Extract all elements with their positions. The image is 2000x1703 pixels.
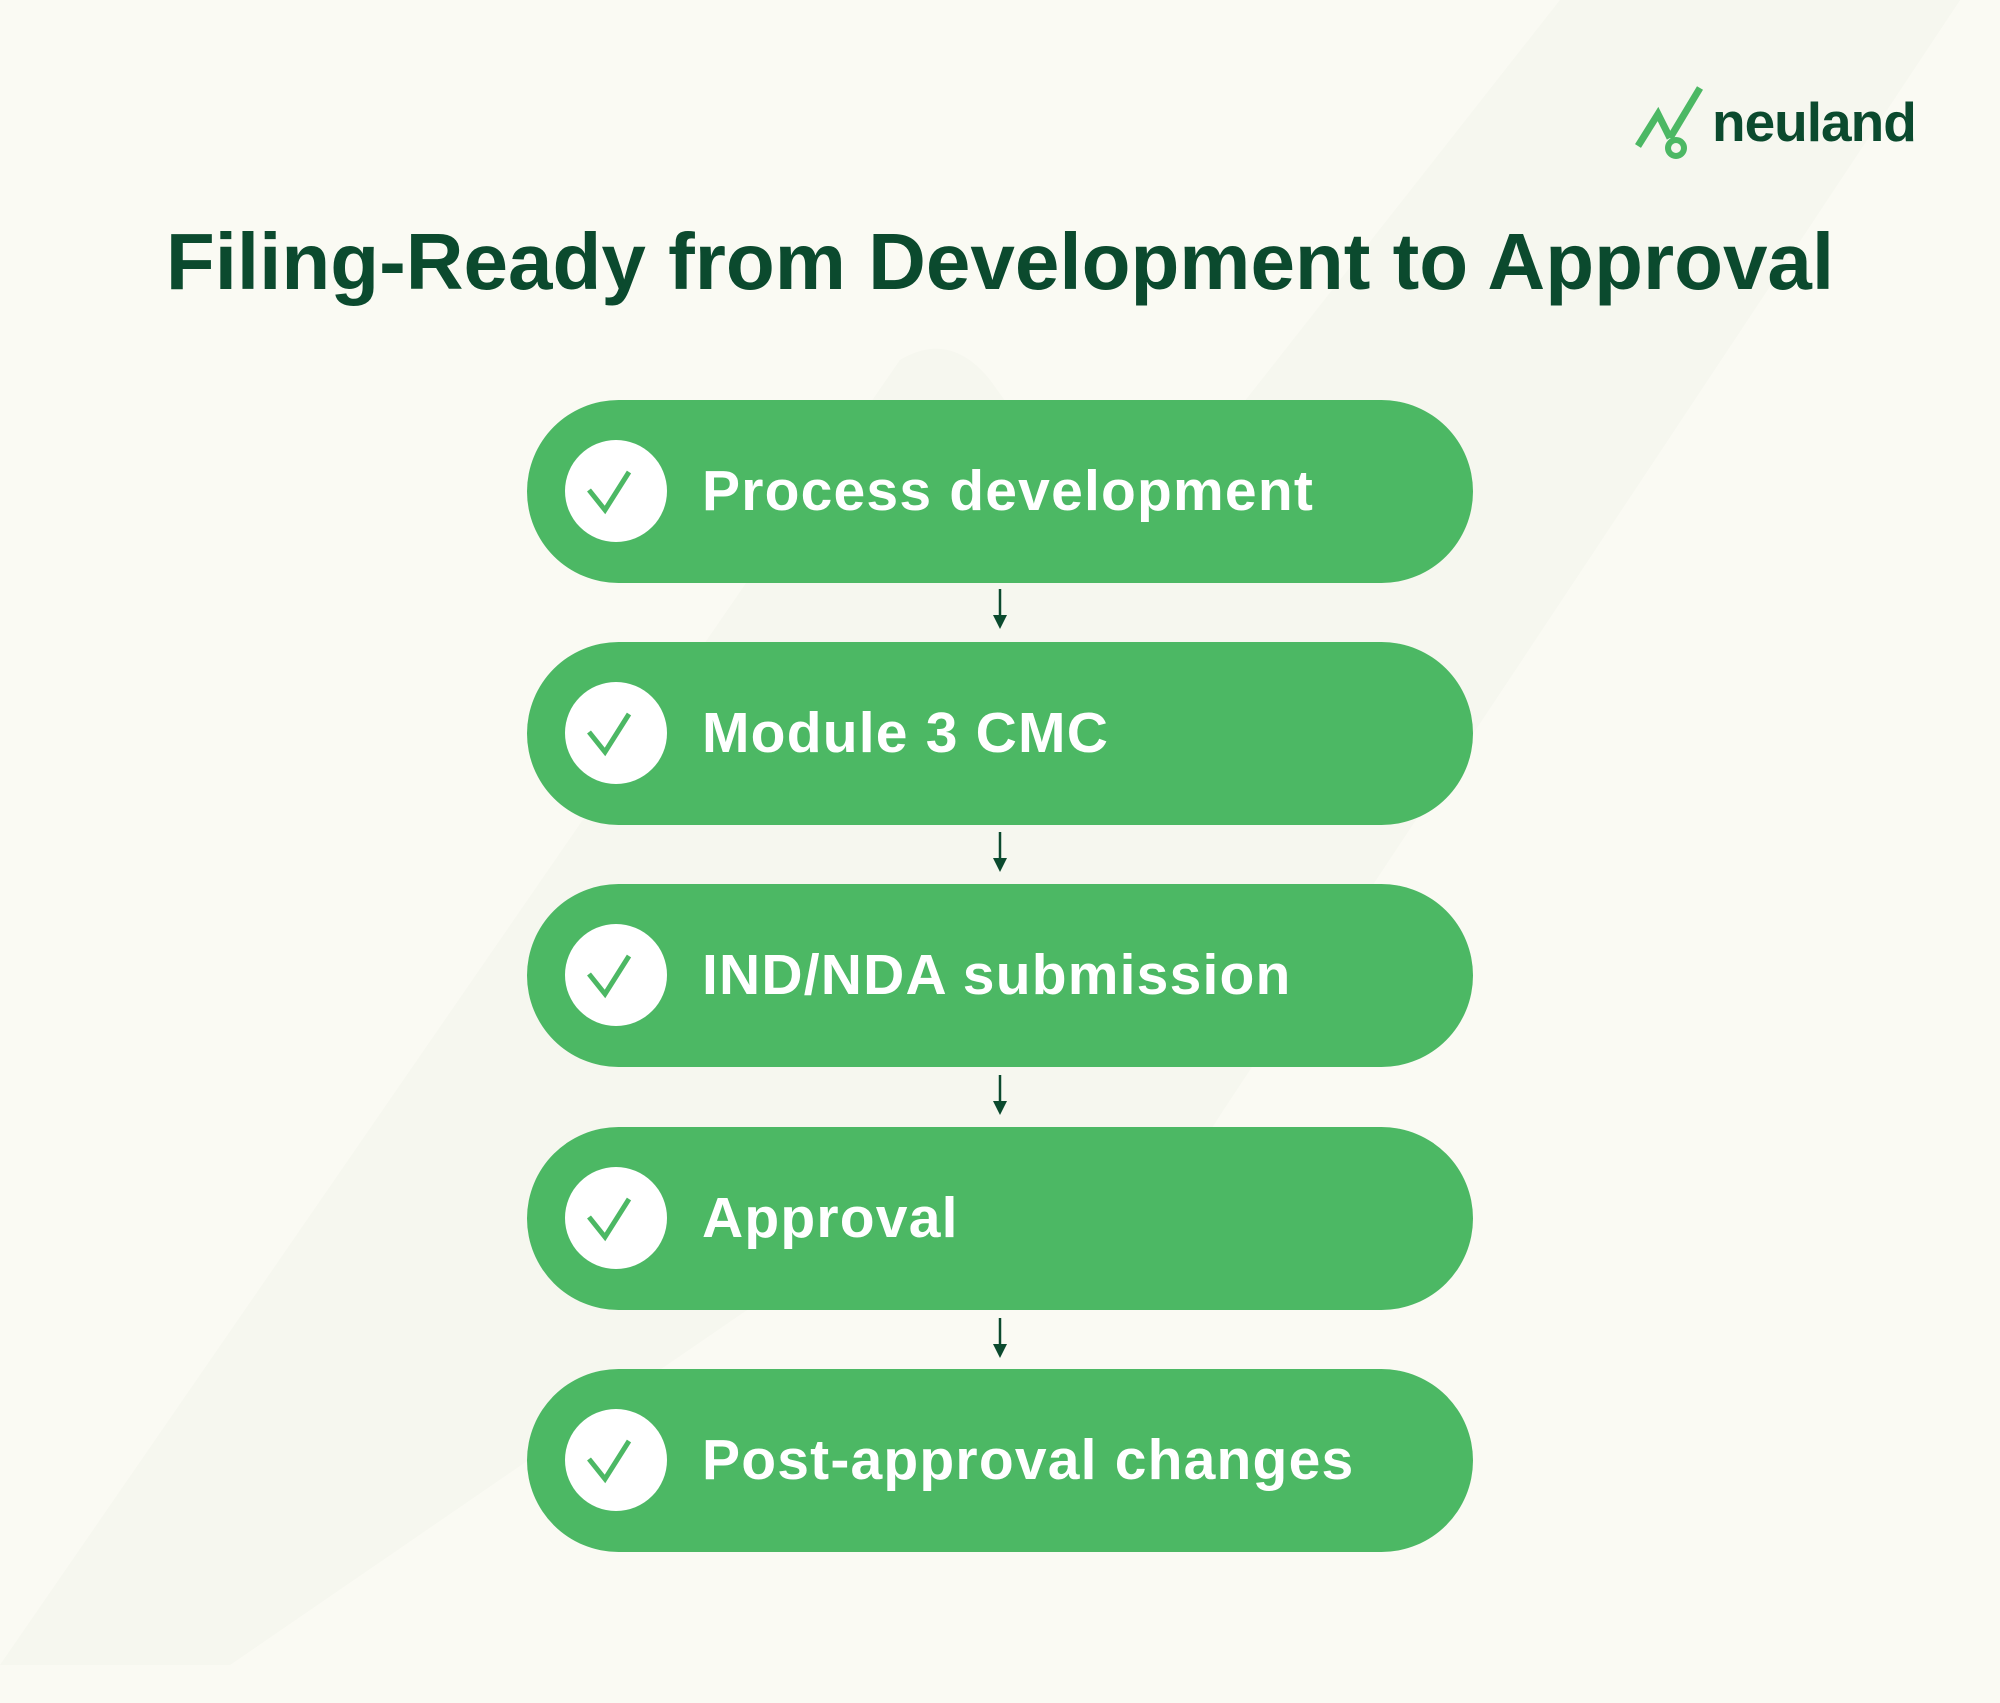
arrow xyxy=(993,1318,1007,1358)
pill: Post-approval changes: Post-approval changes xyxy=(702,1428,1354,1492)
logo xyxy=(1635,86,1916,159)
arrow xyxy=(993,1075,1007,1115)
pill: IND/NDA submission: IND/NDA submission xyxy=(702,943,1292,1007)
pill: Module 3 CMC: Module 3 CMC xyxy=(702,701,1109,765)
arrow xyxy=(993,832,1007,872)
logo text: neuland xyxy=(1712,91,1916,153)
pill: Approval: Approval xyxy=(702,1186,959,1250)
pill: Module 3 CMC xyxy=(527,642,1473,825)
pill: Approval xyxy=(527,1127,1473,1310)
pill: Process development xyxy=(527,400,1473,583)
pill: IND/NDA submission xyxy=(527,884,1473,1067)
pill: Process development: Process development xyxy=(702,459,1314,523)
arrow xyxy=(993,589,1007,629)
title: Filing-Ready from Development to Approval xyxy=(166,217,1834,306)
pill: Post-approval changes xyxy=(527,1369,1473,1552)
icon: logo mark xyxy=(1635,86,1703,159)
